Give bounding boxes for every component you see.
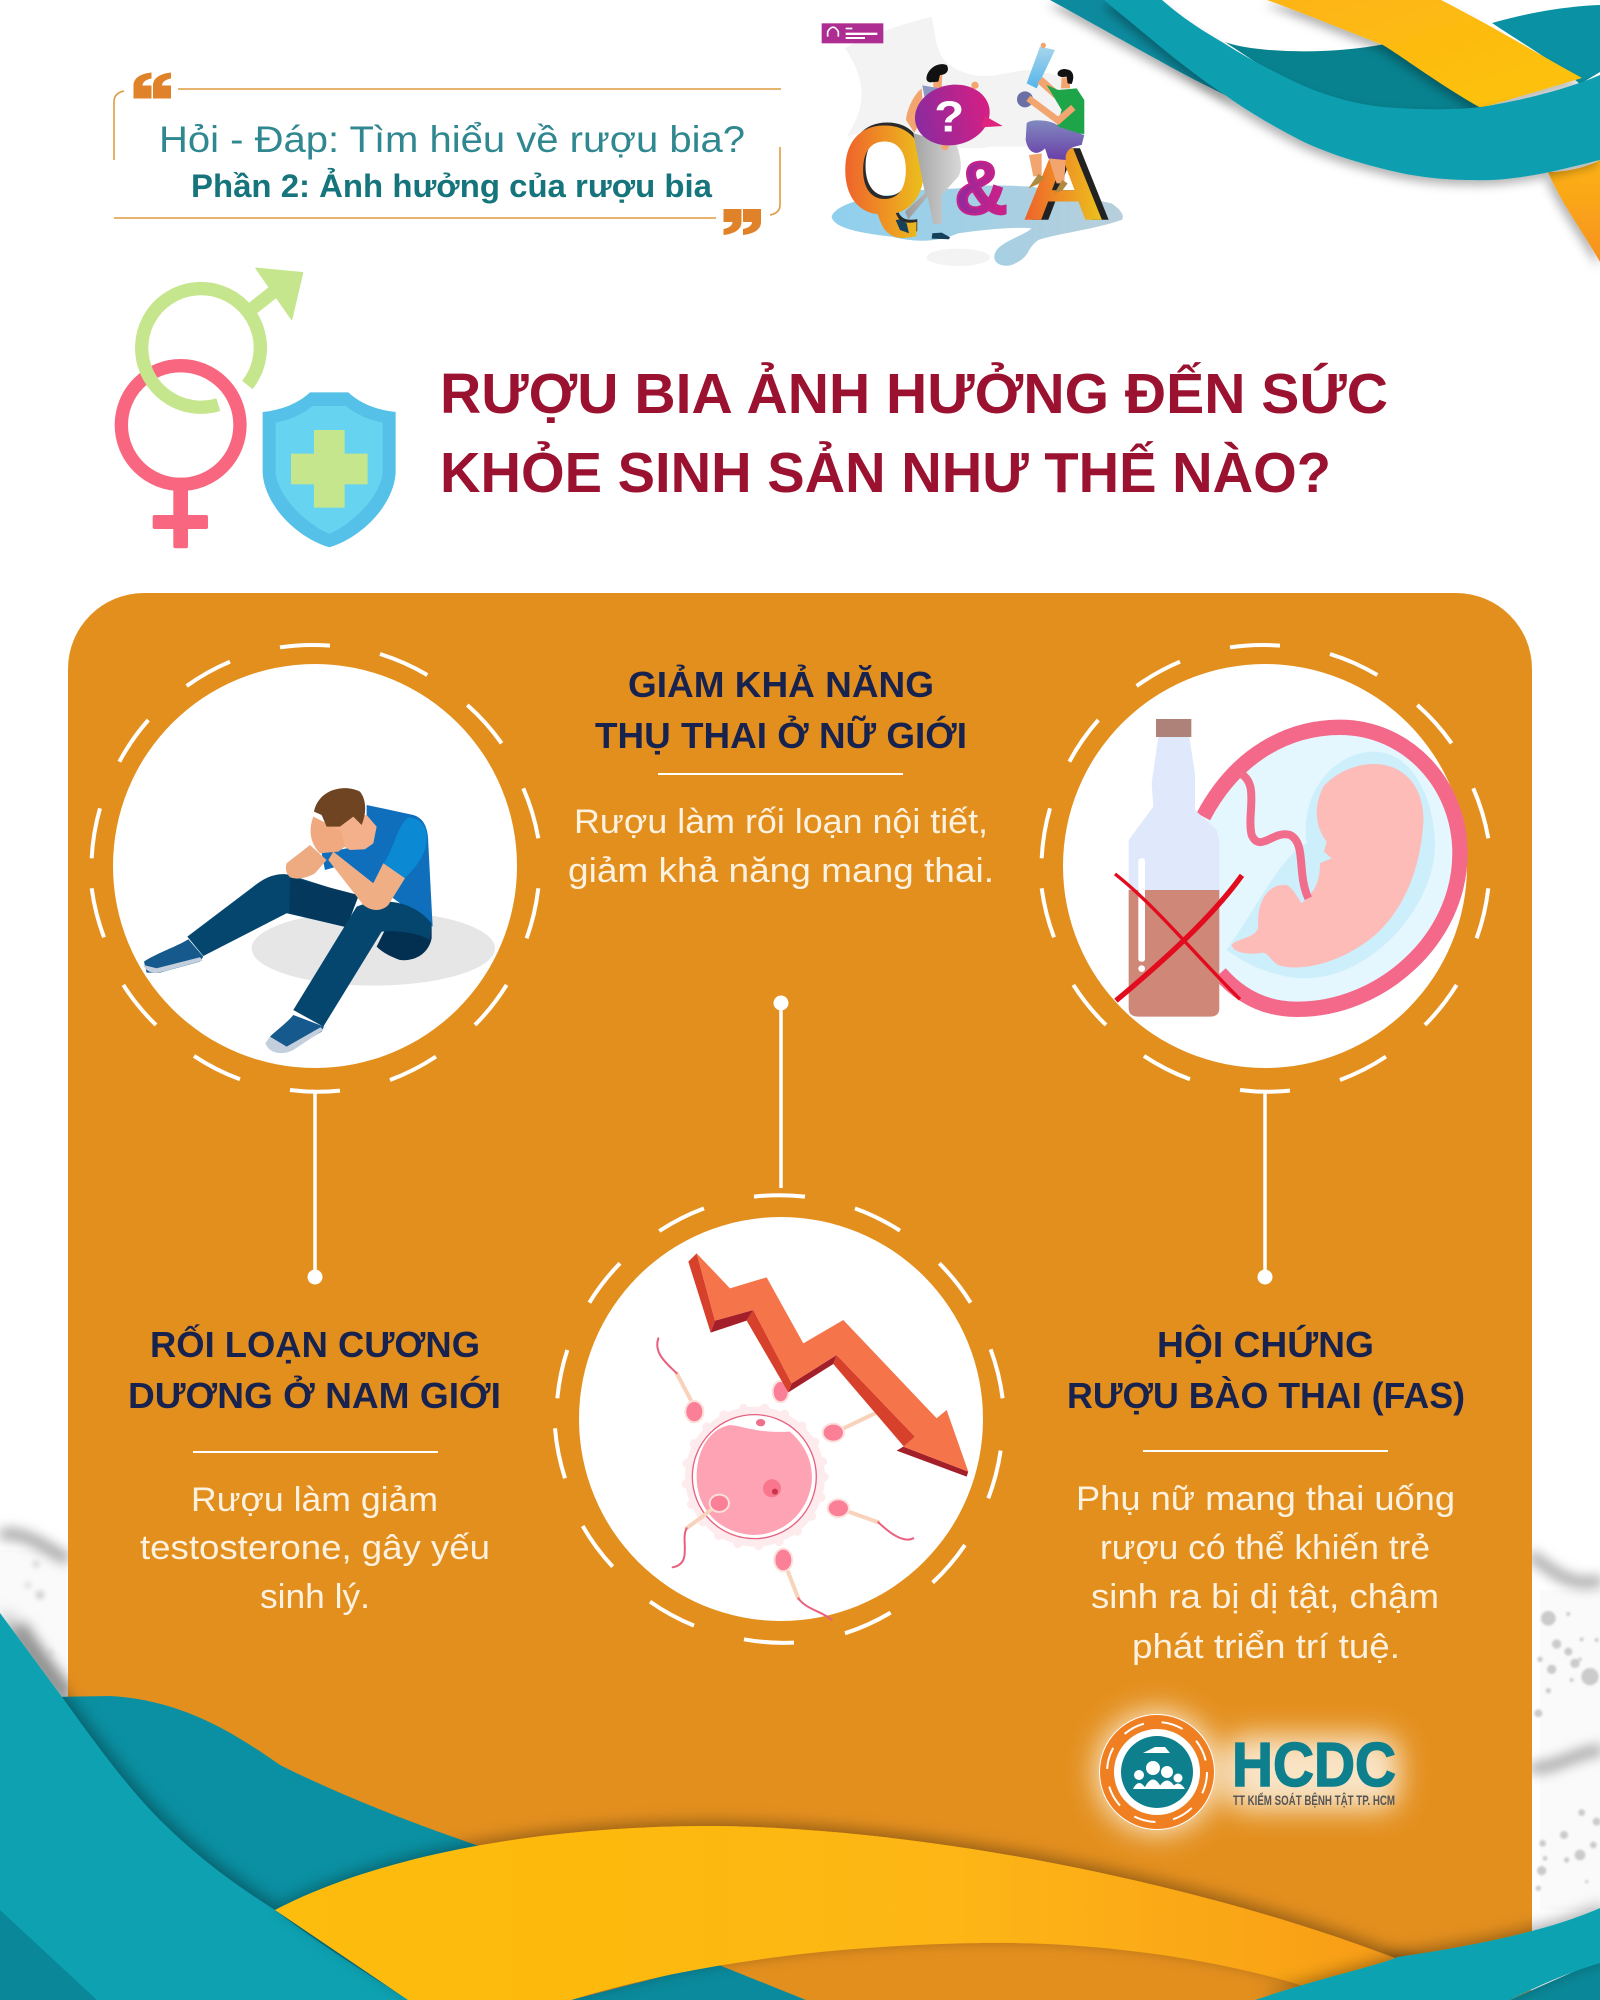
falling arrow (688, 1253, 968, 1477)
connector: left (308, 1092, 322, 1284)
sperm cells (657, 1338, 913, 1620)
ribbon: lower right yellow (1548, 160, 1600, 262)
text block: fetal alcohol syndrome: HỘI CHỨNG (1157, 1323, 1374, 1365)
dashed ring (92, 645, 538, 1092)
ribbon: upper right teal (1492, 5, 1600, 84)
logo glow (1095, 1710, 1400, 1834)
letter A: A (1022, 127, 1105, 243)
text block: female fertility: GIẢM KHẢ NĂNG (628, 664, 934, 705)
panel: orange background (68, 593, 1532, 2000)
shield with cross (263, 392, 396, 547)
ampersand: & (954, 146, 1008, 230)
icon: gender symbols and shield (121, 268, 396, 548)
main title: RƯỢU BIA ẢNH HƯỞNG ĐẾN SỨC (440, 361, 1388, 426)
illustration: Q and A people (822, 17, 1123, 266)
ribbon: teal hump (50, 1696, 520, 2000)
ribbon: right teal band (1255, 1908, 1600, 2000)
letter Q: Q (846, 98, 929, 236)
quote frame lines (114, 89, 781, 218)
ribbon: front teal band (0, 1613, 408, 2000)
icon: opening quote mark (134, 72, 171, 98)
blue floor blob (832, 186, 1123, 266)
connector: right (1258, 1092, 1272, 1284)
text block: female fertility: giảm khả năng mang thai. (568, 852, 994, 890)
text block: erectile dysfunction: Rượu làm giảm (191, 1481, 438, 1519)
dashed ring (1042, 645, 1488, 1092)
bottom ribbon decoration (0, 1613, 1600, 2000)
logo tagline: TT KIỂM SOÁT BỆNH TẬT TP. HCM (1233, 1791, 1395, 1808)
person one (896, 64, 1003, 239)
male symbol (142, 268, 303, 407)
dashed ring (555, 1195, 1003, 1643)
icon: closing quote mark (724, 209, 761, 235)
circle: egg and falling arrow (555, 1195, 1003, 1643)
text block: female fertility (568, 664, 994, 890)
egg illustration (657, 1253, 968, 1620)
circle: sad man (92, 645, 538, 1092)
ribbon: dark teal strip (1050, 0, 1240, 100)
text block: fetal alcohol syndrome: rượu có thể khiến trẻ (1100, 1529, 1430, 1567)
text block: erectile dysfunction: RỐI LOẠN CƯƠNG (150, 1323, 480, 1365)
man illustration (143, 788, 495, 1053)
text block: female fertility: Rượu làm rối loạn nội tiết, (574, 803, 988, 841)
person two (1017, 43, 1084, 193)
text block: erectile dysfunction: DƯƠNG Ở NAM GIỚI (128, 1374, 501, 1416)
logo: HCDC (1095, 1710, 1400, 1834)
badge (822, 23, 883, 43)
ribbon: lower right dark wedge (1510, 1960, 1600, 2000)
ribbon: yellow band (275, 1826, 1510, 2000)
logo wordmark: HCDC (1232, 1731, 1396, 1800)
main title: KHỎE SINH SẢN NHƯ THẾ NÀO? (440, 440, 1331, 505)
gray floor blob (927, 249, 990, 266)
text block: fetal alcohol syndrome: sinh ra bị dị tật, chậm (1091, 1578, 1439, 1616)
fetus and bottle illustration (1115, 719, 1460, 1017)
female symbol (121, 366, 240, 548)
text block: fetal alcohol syndrome: Phụ nữ mang thai uống (1076, 1480, 1455, 1518)
text block: fetal alcohol syndrome (1067, 1323, 1465, 1666)
letter A: A (1029, 127, 1112, 243)
ribbon: yellow band (1267, 0, 1582, 108)
text block: fetal alcohol syndrome: phát triển trí tuệ. (1132, 1628, 1400, 1666)
ribbon: inner dark teal (1225, 42, 1490, 118)
text block: erectile dysfunction: sinh lý. (260, 1578, 370, 1616)
text block: erectile dysfunction (128, 1323, 501, 1616)
circle: bottle and fetus (1042, 645, 1488, 1092)
text block: female fertility: THỤ THAI Ở NỮ GIỚI (595, 714, 967, 756)
ribbon: lower left dark wedge (0, 1910, 97, 2000)
header line 2: Phần 2: Ảnh hưởng của rượu bia (191, 168, 712, 204)
top right ribbon decoration (1050, 0, 1600, 262)
main title (440, 361, 1388, 505)
logo emblem (1099, 1714, 1215, 1830)
ribbon: main teal band (1104, 0, 1600, 180)
text block: erectile dysfunction: testosterone, gây yếu (140, 1529, 490, 1567)
gray backdrop blob (845, 17, 1065, 148)
foam background (0, 1534, 1600, 1910)
header line 1: Hỏi - Đáp: Tìm hiểu về rượu bia? (159, 119, 745, 160)
connector: middle (774, 996, 788, 1188)
ribbon: small teal under yellow (571, 1963, 806, 2000)
person one: ? (934, 93, 964, 142)
letter Q: Q (842, 102, 928, 240)
text block: fetal alcohol syndrome: RƯỢU BÀO THAI (FAS) (1067, 1375, 1465, 1416)
quote box header (114, 72, 781, 235)
